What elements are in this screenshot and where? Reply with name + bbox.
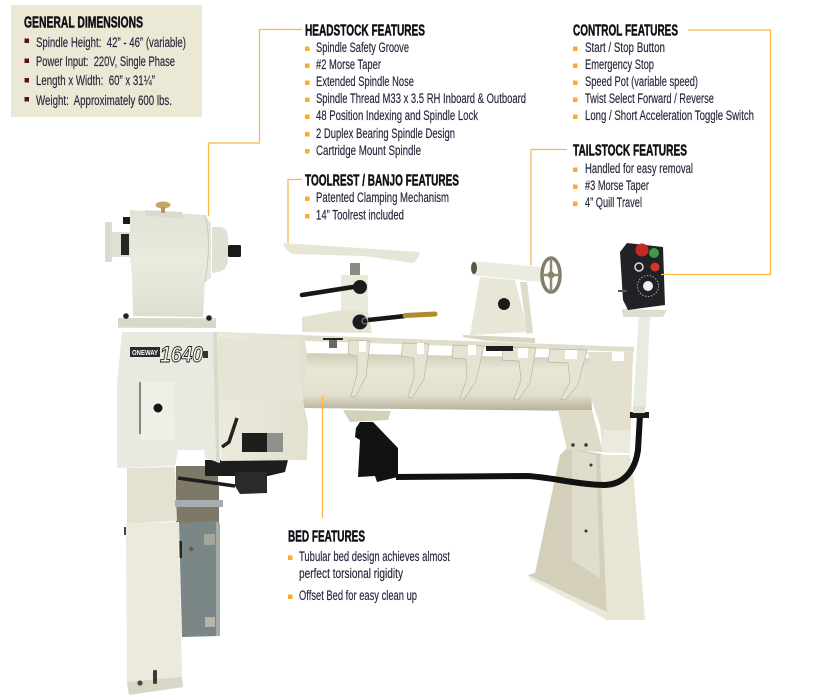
list: headstock features: 48 Position Indexing and Spindle Lock <box>316 108 478 123</box>
list: headstock features: Cartridge Mount Spindle <box>316 143 421 158</box>
cabinet logo <box>130 342 208 367</box>
list: headstock features: Spindle Safety Groove <box>316 40 409 55</box>
heading: headstock features: HEADSTOCK FEATURES <box>305 22 425 40</box>
cabinet logo: ONEWAY <box>132 350 158 357</box>
handwheel <box>542 258 560 292</box>
panel: control features <box>573 22 754 123</box>
list: bed features <box>288 549 450 603</box>
list: control features: Start / Stop Button <box>585 40 665 55</box>
list: dimensions <box>24 35 186 108</box>
heading: bed features: BED FEATURES <box>288 528 365 546</box>
list: headstock features: #2 Morse Taper <box>316 57 381 72</box>
list: tailstock features <box>573 161 693 210</box>
list: headstock features: Extended Spindle Nose <box>316 74 414 89</box>
panel: toolrest and banjo features <box>305 172 459 222</box>
panel: tailstock features <box>573 142 693 210</box>
list: bed features: Offset Bed for easy clean up <box>299 588 417 603</box>
list: dimensions: Length x Width: 60” x 31¼” <box>36 73 155 88</box>
leader lines <box>208 30 770 518</box>
right leg <box>528 352 645 620</box>
leader: bed <box>322 396 324 518</box>
motor and cable <box>178 460 288 494</box>
list: tailstock features: Handled for easy removal <box>585 161 693 176</box>
leader: headstock <box>208 30 302 216</box>
list: toolrest features <box>305 190 449 222</box>
brass knob <box>156 202 170 213</box>
tailstock <box>463 258 560 351</box>
leader: toolrest <box>288 180 302 243</box>
list: toolrest features: 14” Toolrest included <box>316 208 404 222</box>
lock handle and data plate <box>222 418 283 452</box>
list: dimensions: Weight: Approximately 600 lbs. <box>36 93 172 108</box>
list: toolrest features: Patented Clamping Mechanism <box>316 190 449 205</box>
list: headstock features <box>305 40 526 158</box>
list: headstock features: Spindle Thread M33 x 3.5 RH Inboard & Outboard <box>316 91 526 106</box>
leader: control <box>661 30 770 274</box>
bed tube <box>303 353 592 411</box>
list: bed features: Tubular bed design achieves almost <box>299 549 450 564</box>
headstock <box>105 202 241 328</box>
lathe machine <box>105 202 667 695</box>
heading: tailstock features: TAILSTOCK FEATURES <box>573 142 687 160</box>
panel: general dimensions <box>11 5 202 117</box>
list: tailstock features: #3 Morse Taper <box>585 178 649 193</box>
list: dimensions: Power Input: 220V, Single Phase <box>36 54 175 69</box>
top rail with fins <box>217 332 634 400</box>
list: bed features: perfect torsional rigidity <box>299 566 403 581</box>
panel: bed features <box>288 528 450 603</box>
leader: tailstock <box>531 150 567 265</box>
list: control features: Emergency Stop <box>585 57 654 72</box>
heading: general dimensions: GENERAL DIMENSIONS <box>24 14 143 32</box>
list: control features: Speed Pot (variable speed) <box>585 74 698 89</box>
list: control features <box>573 40 754 123</box>
cabinet logo: 1640 <box>160 342 204 367</box>
list: dimensions: Spindle Height: 42” - 46” (variable) <box>36 35 186 50</box>
control pole <box>630 313 650 418</box>
support bracket and black mount <box>343 410 398 482</box>
cabinet hood <box>117 332 308 468</box>
list: control features: Twist Select Forward / Reverse <box>585 91 714 106</box>
heading: control features: CONTROL FEATURES <box>573 22 678 40</box>
heading: toolrest features: TOOLREST / BANJO FEATURES <box>305 172 459 190</box>
control box <box>618 243 667 317</box>
panel: headstock features <box>305 22 526 158</box>
power arm <box>396 415 640 485</box>
list: headstock features: 2 Duplex Bearing Spindle Design <box>316 126 455 141</box>
list: tailstock features: 4” Quill Travel <box>585 195 642 210</box>
toolrest and banjo <box>283 243 435 348</box>
cabinet column and gray panel <box>124 466 236 695</box>
list: control features: Long / Short Acceleration Toggle Switch <box>585 108 754 123</box>
